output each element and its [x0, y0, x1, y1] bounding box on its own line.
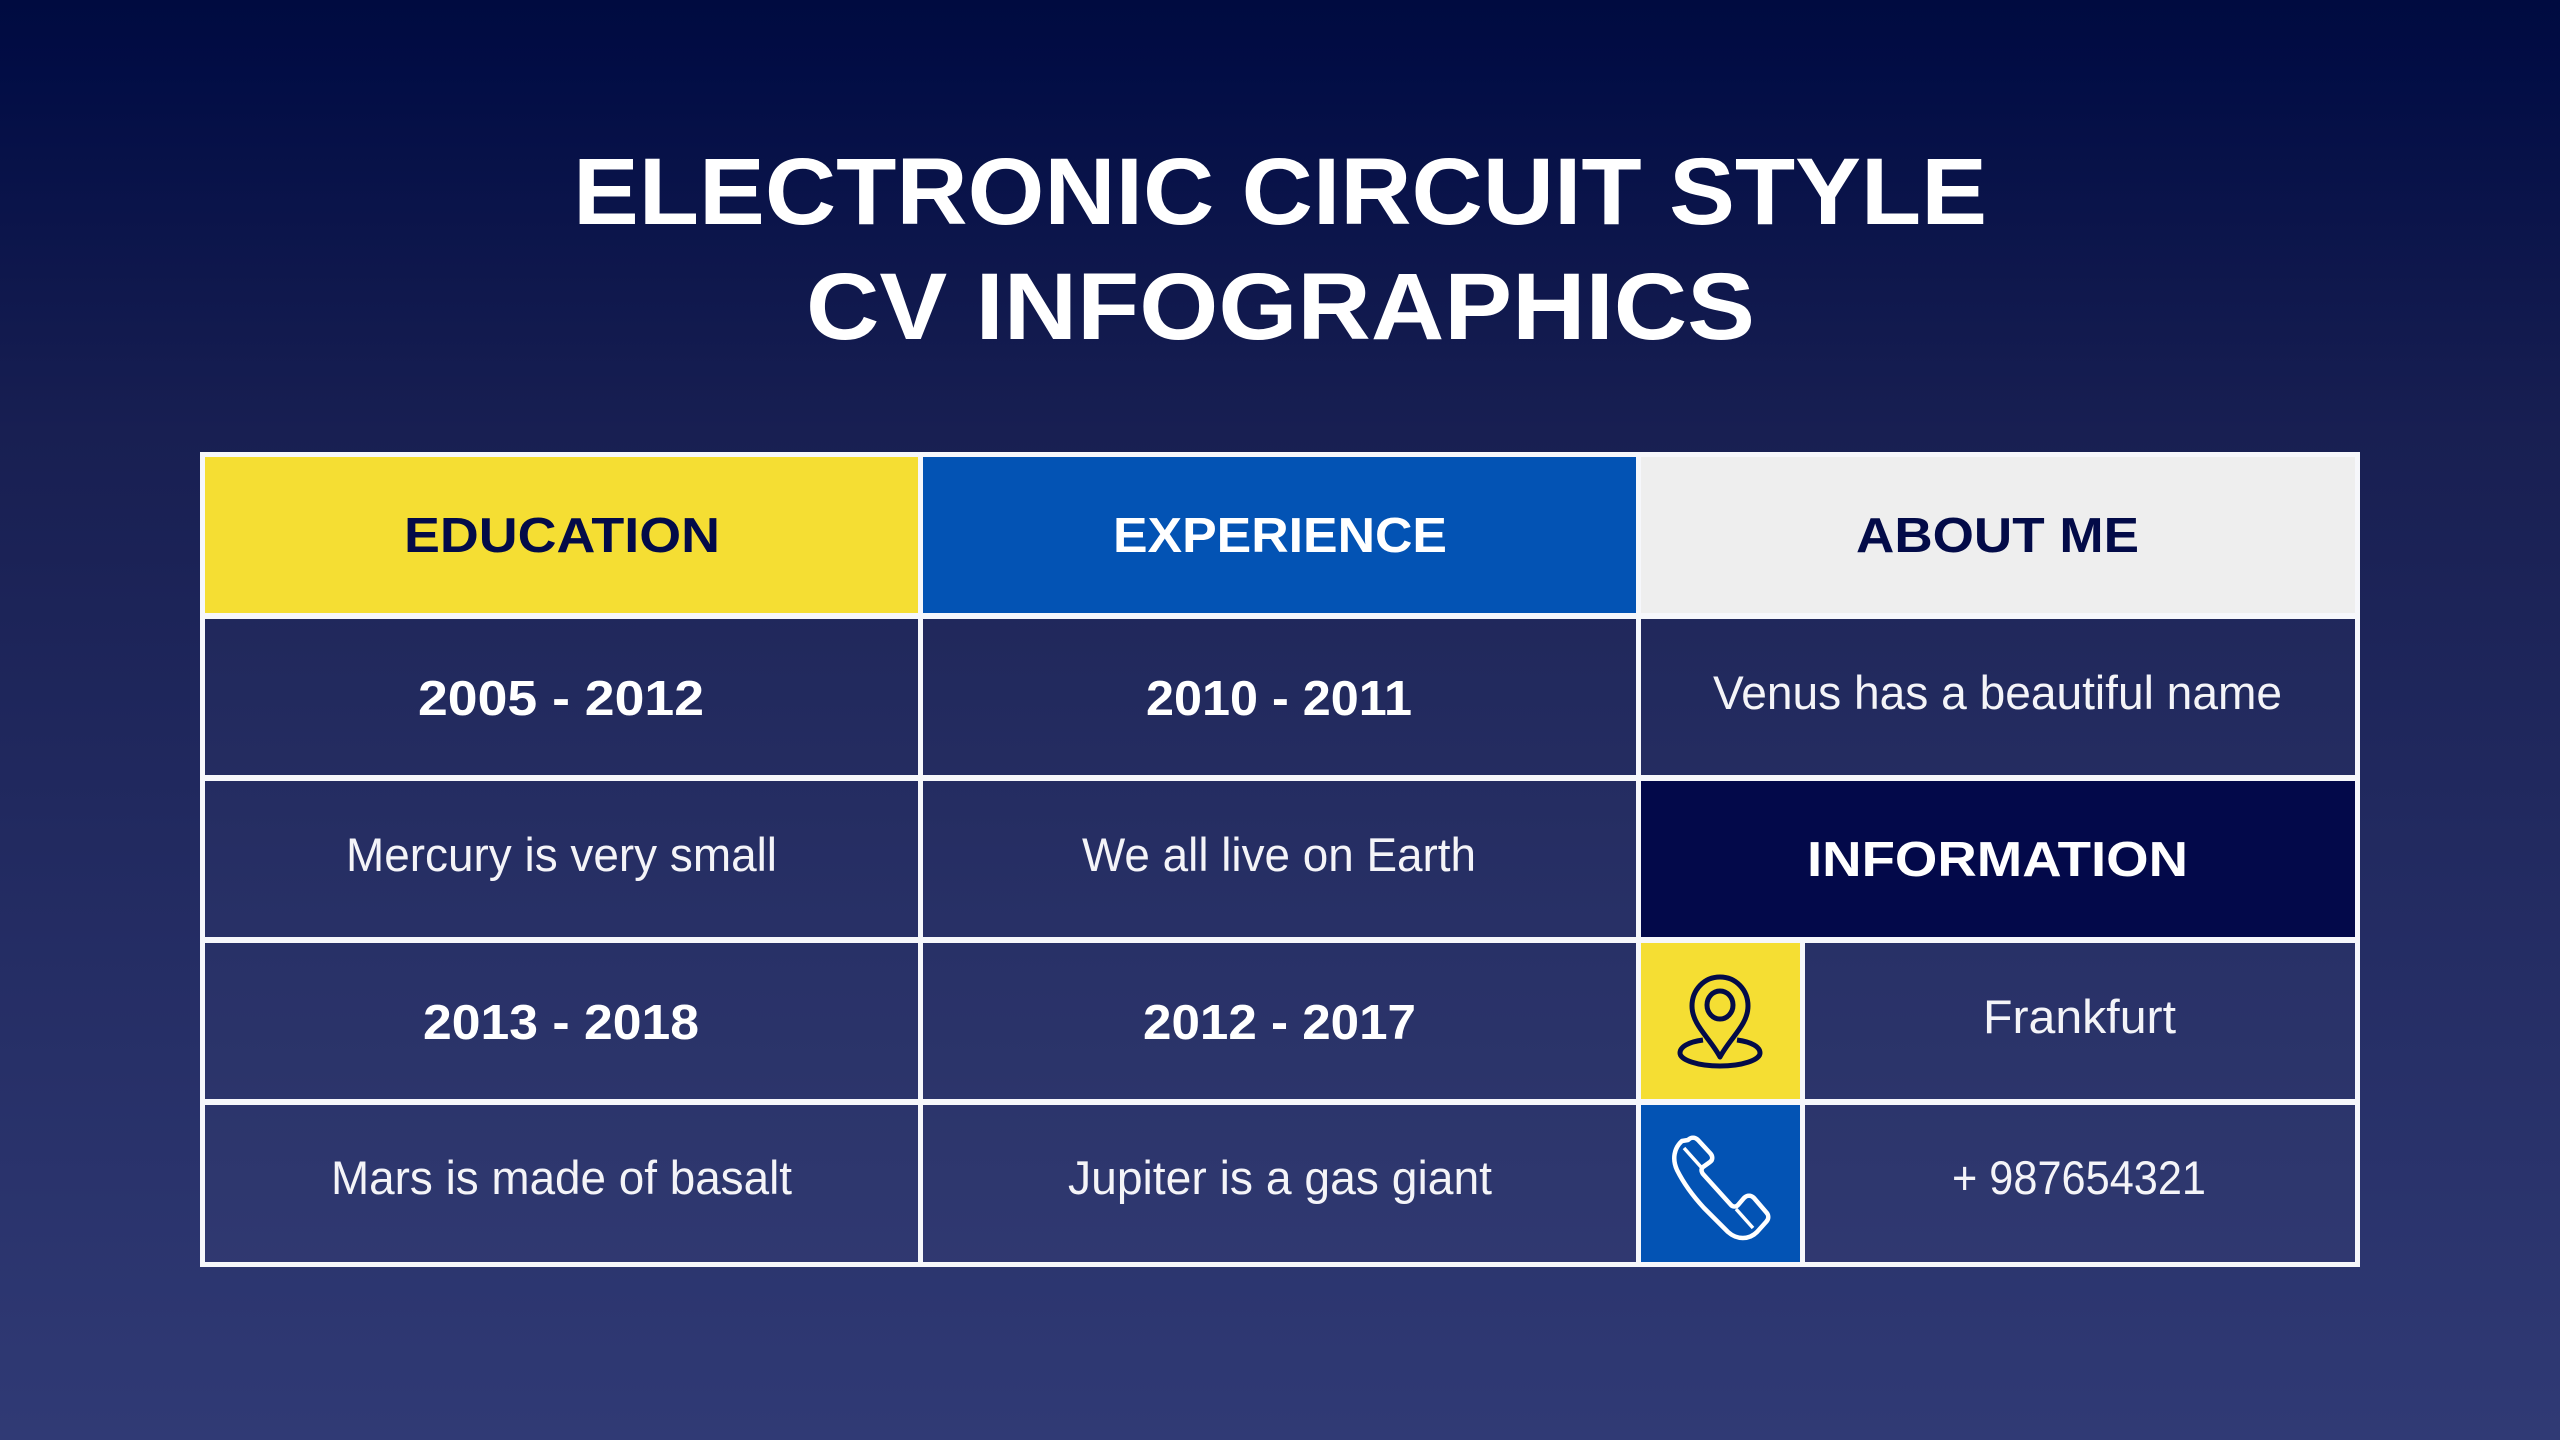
table: [200, 452, 2360, 1267]
header: information: [1638, 778, 2358, 940]
location text: Frankfurt: [1983, 990, 2176, 1043]
experience date 2010 - 2011: 2010 - 2011: [1146, 672, 1412, 726]
header: information: INFORMATION: [1807, 833, 2188, 887]
header: experience: [920, 454, 1638, 616]
experience text: earth: We all live on Earth: [1082, 828, 1476, 881]
header: about me: [1638, 454, 2358, 616]
phone number text: + 987654321: [1952, 1151, 2206, 1204]
cell backgrounds: [202, 454, 2358, 1264]
education text: mars: Mars is made of basalt: [331, 1151, 792, 1204]
header: about me: ABOUT ME: [1856, 509, 2139, 563]
about me text: Venus has a beautiful name: [1713, 666, 2282, 719]
experience date 2012 - 2017: 2012 - 2017: [1143, 996, 1416, 1050]
header: education: EDUCATION: [404, 509, 720, 563]
icon: phone: [1638, 1102, 1802, 1264]
header: experience: EXPERIENCE: [1113, 509, 1447, 563]
table grid lines: [200, 452, 2360, 1267]
education text: mercury: Mercury is very small: [346, 828, 777, 881]
title: ELECTRONIC CIRCUIT STYLE: [573, 139, 1987, 245]
experience text: jupiter: Jupiter is a gas giant: [1068, 1151, 1492, 1204]
education date 2013 - 2018: 2013 - 2018: [423, 996, 699, 1050]
title: CV INFOGRAPHICS: [806, 254, 1755, 360]
header: education: [202, 454, 920, 616]
education date 2005 - 2012: 2005 - 2012: [418, 672, 704, 726]
title: [573, 139, 1987, 360]
icon: location pin: [1638, 940, 1802, 1102]
